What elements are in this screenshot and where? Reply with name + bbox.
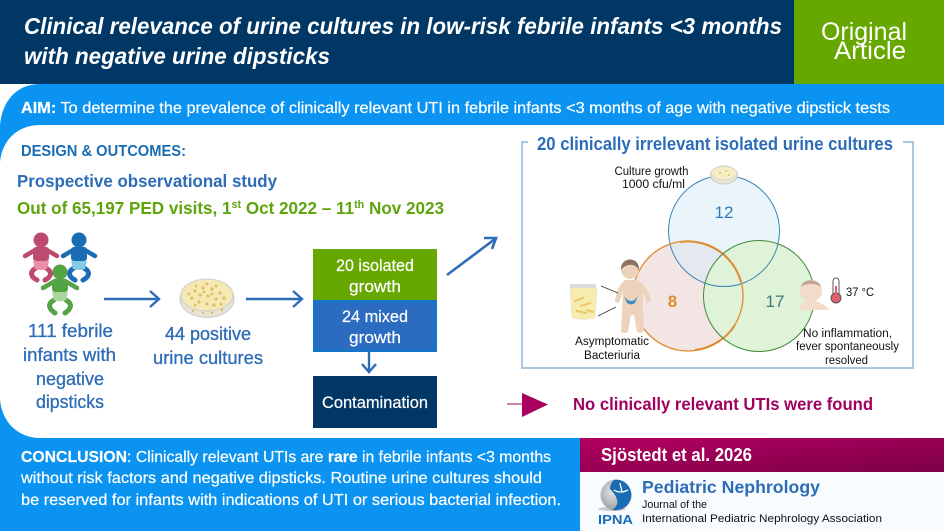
panel: design and outcomes: [0, 125, 944, 438]
icon: IPNA sphere: [598, 480, 632, 511]
box: 24 mixed growth: [314, 302, 436, 350]
citation banner: Sjöstedt et al. 2026: [601, 444, 752, 465]
text: 111 febrile infants: [23, 321, 116, 412]
box: 20 isolated growth: 20 isolated: [336, 257, 414, 275]
label: culture growth: [614, 166, 688, 191]
arrow: infants to cultures: [104, 291, 159, 307]
panel: journal logo: Journal of the: [642, 499, 707, 511]
icon: infant head and shoulders: [799, 280, 829, 310]
arrow: isolated growth to venn: [447, 238, 496, 275]
venn diagram: 8: [668, 292, 677, 311]
study type: Prospective observational study: [17, 171, 277, 191]
title: [24, 13, 782, 69]
heading: design and outcomes: DESIGN & OUTCOMES:: [21, 143, 186, 160]
icon: urine sample cup: [570, 284, 618, 320]
title: Clinical relevance of urine cultures in low-risk febrile infants <3 months: [24, 13, 782, 39]
icon: infant with bladder: [615, 260, 651, 333]
badge: original article: [794, 0, 944, 84]
badge: original article: Original: [821, 18, 907, 46]
aim statement: AIM: To determine the prevalence of clinically relevant UTI in febrile infants <3 months of age with negative dipstick tests: [21, 100, 890, 117]
panel: journal logo: IPNA: [598, 513, 633, 527]
study period: Nov 2023: [364, 198, 444, 218]
icon: three infants: [25, 232, 95, 313]
text: 111 febrile infants: 111 febrile: [28, 321, 113, 341]
venn diagram: 17: [766, 292, 784, 311]
study period: st: [232, 199, 241, 211]
result text: No clinically relevant UTIs were found: [573, 394, 873, 414]
label: culture growth: Culture growth: [614, 166, 688, 178]
text: 111 febrile infants: infants with: [23, 345, 116, 365]
text: 44 positive urine cultures: [153, 324, 263, 368]
label: temperature: 37 °C: [846, 287, 874, 299]
label: no inflammation: [796, 328, 899, 367]
text: 44 positive urine cultures: urine cultures: [153, 348, 263, 368]
arrow: cultures to growth: [246, 291, 302, 307]
conclusion: without risk factors and negative dipsticks. Routine urine cultures should: [20, 470, 542, 487]
box: 20 isolated growth: growth: [349, 278, 401, 296]
conclusion: be reserved for infants with indications of UTI or serious bacterial infection.: [21, 492, 561, 509]
box: contamination: [313, 376, 437, 428]
badge: original article: Article: [834, 37, 906, 65]
label: asymptomatic bacteriuria: Bacteriuria: [584, 350, 641, 362]
box: 20 isolated growth: [313, 249, 437, 300]
study period: Out of 65,197 PED visits, 1: [17, 198, 237, 218]
panel: journal logo: [580, 472, 944, 531]
text: 44 positive urine cultures: 44 positive: [165, 324, 251, 344]
conclusion: CONCLUSION: Clinically relevant UTIs are rare in febrile infants <3 months: [21, 449, 551, 466]
panel: journal logo: Pediatric Nephrology: [642, 477, 820, 497]
conclusion: [20, 449, 561, 509]
arrow: mixed growth to contamination: [362, 352, 376, 372]
venn diagram: 12: [715, 203, 733, 222]
header background: [0, 0, 944, 84]
box: 24 mixed growth: 24 mixed: [342, 308, 408, 326]
box: contamination: Contamination: [322, 394, 428, 412]
label: no inflammation: fever spontaneously: [796, 341, 899, 353]
box: 24 mixed growth: growth: [349, 329, 401, 347]
text: 111 febrile infants: negative: [36, 369, 104, 389]
panel: journal logo: International Pediatric Nephrology Association: [642, 513, 882, 525]
label: no inflammation: resolved: [825, 355, 868, 367]
label: asymptomatic bacteriuria: [575, 336, 649, 362]
icon: small petri dish: [710, 166, 738, 184]
arrow: result marker: [507, 393, 548, 417]
study period: th: [354, 199, 365, 211]
icon: thermometer: [831, 278, 841, 303]
label: asymptomatic bacteriuria: Asymptomatic: [575, 336, 649, 348]
citation banner: [580, 438, 944, 472]
icon: petri dish: [180, 279, 234, 318]
venn diagram: [633, 176, 814, 352]
text: 111 febrile infants: dipsticks: [36, 392, 104, 412]
title: with negative urine dipsticks: [24, 43, 330, 69]
heading: irrelevant cultures: 20 clinically irrelevant isolated urine cultures: [537, 134, 893, 154]
study period: Oct 2022 – 11: [241, 198, 354, 218]
label: no inflammation: No inflammation,: [803, 328, 892, 340]
label: culture growth: 1000 cfu/ml: [622, 179, 685, 191]
panel: irrelevant cultures frame: [522, 142, 913, 368]
